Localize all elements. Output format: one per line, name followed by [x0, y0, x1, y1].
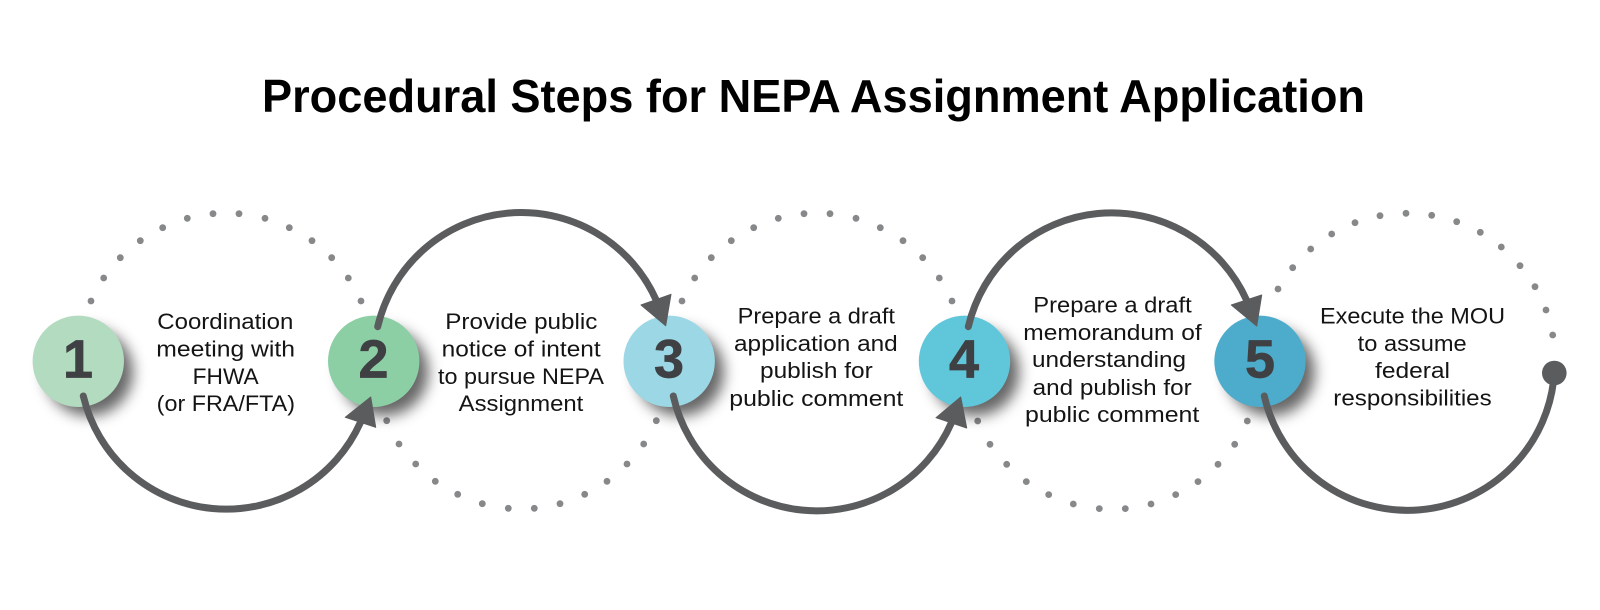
step 5 text: Execute the MOU	[1320, 303, 1505, 328]
step 5 badge: 5	[1245, 330, 1275, 390]
step 3 badge: 3	[654, 330, 684, 390]
step 3 badge	[624, 316, 724, 416]
step 1 text	[156, 309, 295, 416]
step 1 text: FHWA	[193, 364, 259, 389]
step 4 text: memorandum of	[1023, 320, 1203, 345]
arrow: step 1 to step 2	[83, 396, 376, 509]
step 3 text	[729, 303, 904, 411]
step 4 text: understanding	[1032, 347, 1186, 372]
step 3 text: publish for	[760, 358, 873, 383]
step 4 text	[1023, 293, 1203, 427]
step 2 text: notice of intent	[442, 336, 602, 362]
step 5 text	[1320, 303, 1505, 411]
step 4 badge	[919, 316, 1019, 416]
step 4 text: public comment	[1025, 402, 1200, 427]
step 1 badge	[33, 316, 133, 416]
dotted arc: bottom of step 4	[974, 418, 1251, 512]
step 2 text: to pursue NEPA	[438, 364, 604, 389]
step 3 text: application and	[734, 331, 898, 356]
step 2 text: Provide public	[445, 309, 597, 334]
title: Procedural Steps for NEPA Assignment Application	[262, 70, 1365, 122]
step 2 text: Assignment	[459, 391, 584, 416]
step 5 text: to assume	[1358, 331, 1467, 356]
step 1 badge: 1	[63, 330, 93, 390]
dotted arc: bottom of step 2	[383, 417, 660, 512]
step 3 text: public comment	[729, 386, 904, 411]
step 1 text: Coordination	[157, 309, 293, 334]
step 2 text	[438, 309, 604, 416]
dotted arc: top of step 5	[1275, 210, 1556, 338]
step 5 badge	[1214, 316, 1315, 416]
dotted arc: top of step 1	[88, 210, 364, 304]
dotted arc: top of step 3	[679, 210, 955, 304]
step 4 badge: 4	[949, 330, 979, 390]
step 5 text: responsibilities	[1333, 386, 1492, 411]
step 3 text: Prepare a draft	[738, 303, 896, 328]
arc: step 5 to end point	[1264, 361, 1567, 510]
step 5 text: federal	[1375, 358, 1450, 383]
step 2 badge: 2	[358, 330, 389, 390]
step 4 text: Prepare a draft	[1033, 293, 1192, 318]
arrow: step 3 to step 4	[673, 396, 967, 511]
arrow: step 4 to step 5	[968, 213, 1262, 327]
step 2 badge	[328, 316, 428, 416]
step 1 text: (or FRA/FTA)	[157, 391, 295, 416]
step 1 text: meeting with	[156, 336, 295, 362]
arrow: step 2 to step 3	[378, 213, 671, 327]
step 4 text: and publish for	[1033, 375, 1192, 400]
